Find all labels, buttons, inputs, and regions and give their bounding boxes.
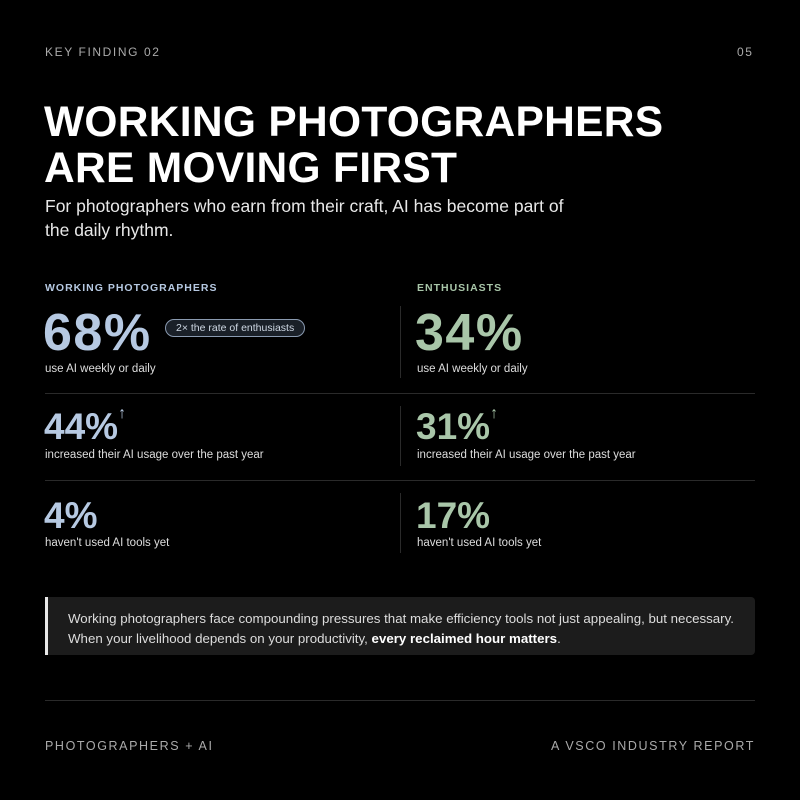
- label: use AI weekly or daily: [45, 363, 156, 375]
- stat 17%: 17%: [416, 495, 490, 536]
- panel: working photographers: [43, 282, 305, 549]
- subtitle: [45, 196, 564, 240]
- footer right: A VSCO INDUSTRY REPORT: [551, 739, 755, 753]
- footer left: PHOTOGRAPHERS + AI: [45, 739, 214, 753]
- panel: enthusiasts: haven't used AI tools yet: [417, 537, 541, 549]
- page number: 05: [737, 45, 754, 59]
- callout: [45, 597, 755, 655]
- subtitle: For photographers who earn from their craft, AI has become part of: [45, 196, 563, 216]
- badge: 2× the rate of enthusiasts: [176, 322, 294, 334]
- callout: When your livelihood depends on your productivity, every reclaimed hour matters.: [68, 631, 561, 646]
- title: ARE MOVING FIRST: [44, 145, 457, 192]
- header label: KEY FINDING 02: [45, 45, 161, 59]
- title: [44, 99, 663, 192]
- stat 31%: 31%↑: [416, 405, 498, 447]
- panel: enthusiasts: increased their AI usage over the past year: [417, 449, 636, 461]
- panel: working photographers: increased their AI usage over the past year: [45, 449, 264, 461]
- stat 4%: 4%: [44, 495, 97, 536]
- column heading: WORKING PHOTOGRAPHERS: [45, 282, 217, 294]
- panel: enthusiasts: use AI weekly or daily: [417, 363, 528, 375]
- stat 34%: 34%: [415, 304, 524, 362]
- panel: working photographers: haven't used AI tools yet: [45, 537, 169, 549]
- title: WORKING PHOTOGRAPHERS: [44, 99, 663, 146]
- badge: [165, 319, 305, 337]
- stat 44%: 44%↑: [44, 405, 126, 447]
- callout: Working photographers face compounding pressures that make efficiency tools not just appealing, but necessary.: [68, 611, 734, 626]
- column heading: ENTHUSIASTS: [417, 282, 502, 294]
- subtitle: the daily rhythm.: [45, 220, 173, 240]
- panel: enthusiasts: [415, 282, 636, 549]
- stat 68%: 68%: [43, 304, 152, 362]
